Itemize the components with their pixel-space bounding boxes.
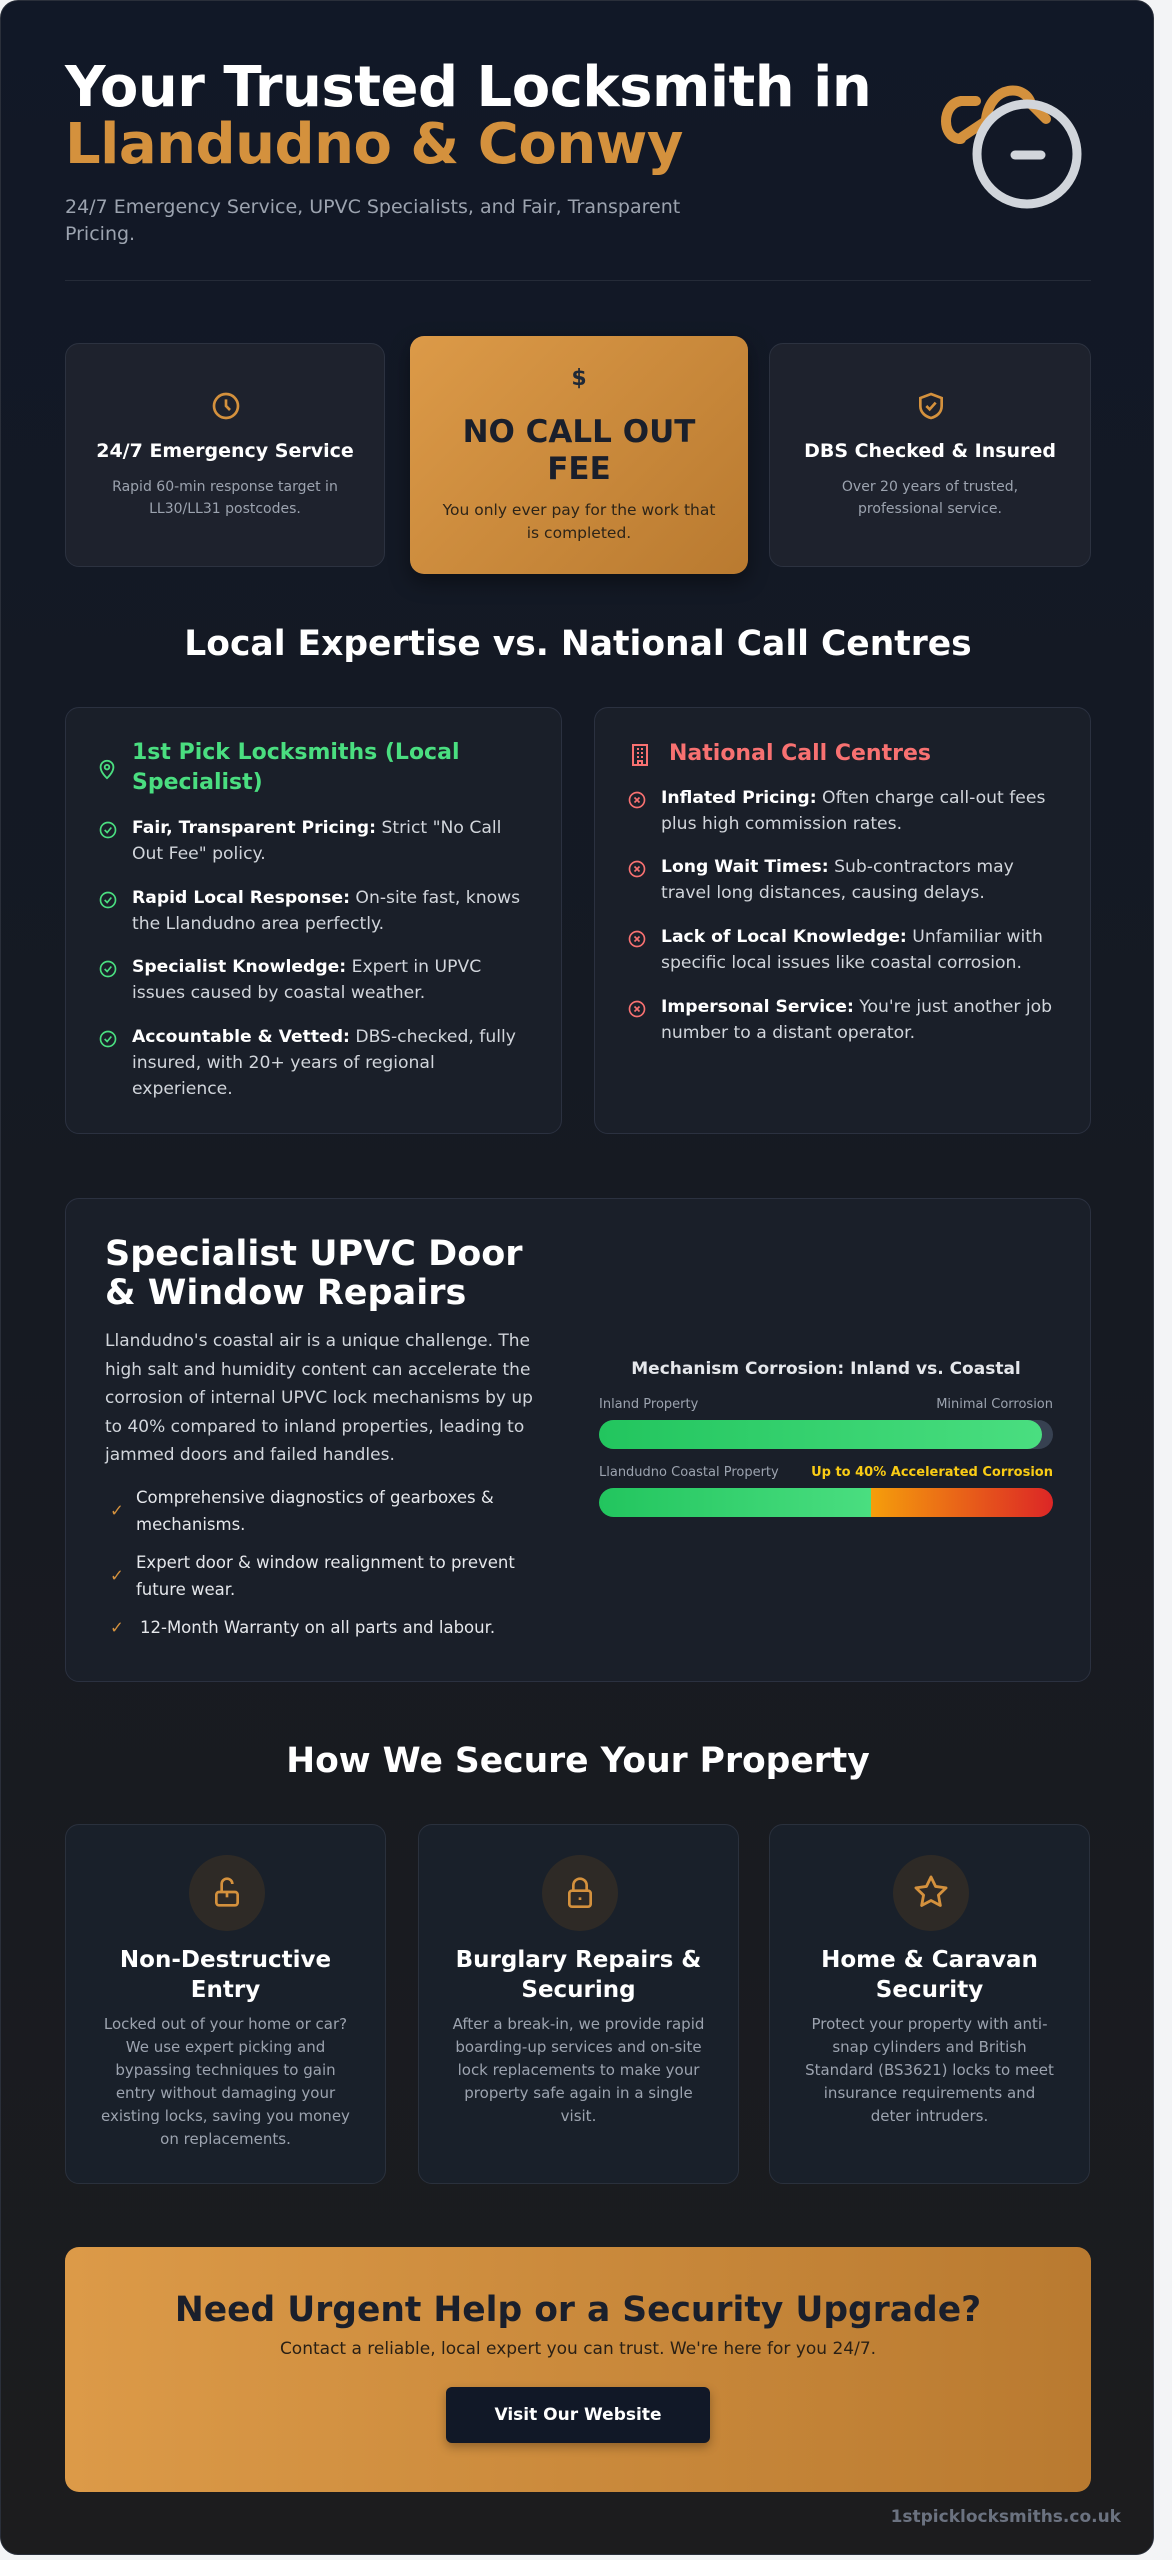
panel: local: Specialist Knowledge: Expert in UPVC issues caused by coastal weather. bbox=[132, 957, 481, 1003]
panel: national: Impersonal Service: You're just another job number to a distant operator. bbox=[661, 997, 1052, 1043]
CTA: Contact a reliable, local expert you can trust. We're here for you 24/7. bbox=[280, 2339, 876, 2359]
card: no call out fee bbox=[410, 336, 748, 574]
chart: corrosion: Mechanism Corrosion: Inland vs. Coastal bbox=[631, 1359, 1021, 1379]
chart: corrosion: Up to 40% Accelerated Corrosion bbox=[811, 1465, 1053, 1480]
card: 24/7: 24/7 Emergency Service bbox=[96, 440, 354, 462]
chart: corrosion bbox=[599, 1359, 1053, 1517]
card: no call out fee: $ bbox=[571, 366, 587, 391]
service: burglary: Burglary Repairs & Securing bbox=[456, 1947, 701, 2003]
service: non-destructive: Locked out of your home or car? We use expert picking and bypassing techniques to gain entry without damaging your existing locks, saving you money on replacements. bbox=[101, 2015, 350, 2148]
text: coastal para: Llandudno's coastal air is a unique challenge. The high salt and humidity content can accelerate the corrosion of internal UPVC lock mechanisms by up to 40% compared to inland properties, leading to jammed doors and failed handles. bbox=[105, 1331, 533, 1465]
card: DBS: Over 20 years of trusted, professional service. bbox=[842, 479, 1018, 517]
subtitle: 24/7 Emergency Service, UPVC Specialists, and Fair, Transparent Pricing. bbox=[65, 196, 680, 245]
icon: unlock bbox=[189, 1855, 265, 1931]
card: no call out fee: NO CALL OUT bbox=[463, 414, 695, 450]
panel: local: Rapid Local Response: On-site fast, knows the Llandudno area perfectly. bbox=[132, 888, 520, 934]
checklist: Expert door & window realignment to prevent future wear. bbox=[136, 1553, 515, 1598]
service: non-destructive bbox=[65, 1824, 386, 2184]
icon: lock bbox=[542, 1855, 618, 1931]
icon: pin bbox=[100, 760, 114, 780]
chart: corrosion: Minimal Corrosion bbox=[936, 1397, 1053, 1412]
button bbox=[446, 2387, 710, 2443]
CTA: Need Urgent Help or a Security Upgrade? bbox=[175, 2290, 981, 2330]
panel: UPVC bbox=[65, 1198, 1091, 1682]
icon: shield bbox=[919, 392, 943, 420]
CTA bbox=[65, 2247, 1091, 2492]
panel: local: Fair, Transparent Pricing: Strict "No Call Out Fee" policy. bbox=[132, 818, 501, 864]
footer: 1stpicklocksmiths.co.uk bbox=[891, 2507, 1121, 2527]
service: home & caravan: Home & Caravan Security bbox=[821, 1947, 1038, 2003]
card: 24/7: Rapid 60-min response target in LL30/LL31 postcodes. bbox=[112, 479, 338, 517]
checklist: 12-Month Warranty on all parts and labour. bbox=[140, 1618, 495, 1637]
checklist bbox=[110, 1488, 515, 1637]
service: burglary: After a break-in, we provide rapid boarding-up services and on-site lock replacements to make your property safe again in a single visit. bbox=[453, 2015, 704, 2125]
icon: star bbox=[893, 1855, 969, 1931]
title bbox=[64, 55, 871, 177]
panel: national: Long Wait Times: Sub-contractors may travel long distances, causing delays. bbox=[661, 857, 1014, 903]
checklist: ✓ bbox=[110, 1501, 124, 1520]
icon: clock bbox=[212, 392, 240, 420]
panel: local: 1st Pick Locksmiths (Local Specialist) bbox=[132, 740, 460, 795]
checklist: Comprehensive diagnostics of gearboxes & mechanisms. bbox=[136, 1488, 494, 1534]
chart: corrosion: Llandudno Coastal Property bbox=[599, 1465, 779, 1480]
button: Visit Our Website bbox=[494, 2405, 661, 2425]
card: DBS: DBS Checked & Insured bbox=[804, 440, 1056, 462]
service: burglary bbox=[418, 1824, 739, 2184]
panel: local: Accountable & Vetted: DBS-checked, fully insured, with 20+ years of regional experience. bbox=[132, 1027, 516, 1099]
icon: building bbox=[632, 744, 648, 766]
card: no call out fee: You only ever pay for the work that bbox=[443, 501, 715, 519]
card: DBS bbox=[769, 343, 1091, 567]
panel: national bbox=[594, 707, 1091, 1134]
card: no call out fee: is completed. bbox=[527, 524, 631, 542]
title: Your Trusted Locksmith in bbox=[65, 55, 871, 120]
service: non-destructive: Non-Destructive Entry bbox=[120, 1947, 331, 2003]
heading: how we secure: How We Secure Your Property bbox=[286, 1741, 870, 1781]
panel: national: National Call Centres bbox=[669, 741, 931, 766]
heading: local vs national: Local Expertise vs. National Call Centres bbox=[184, 624, 972, 664]
card: no call out fee: FEE bbox=[547, 451, 611, 487]
service: home & caravan: Protect your property with anti-snap cylinders and British Standard (BS3621) locks to meet insurance requirements and deter intruders. bbox=[805, 2015, 1054, 2125]
card: 24/7 bbox=[65, 343, 385, 567]
panel: local bbox=[65, 707, 562, 1134]
heading: UPVC: Specialist UPVC Door & Window Repairs bbox=[105, 1234, 523, 1313]
icon: lock/link bbox=[941, 86, 1082, 208]
panel: national: Inflated Pricing: Often charge call-out fees plus high commission rates. bbox=[661, 788, 1045, 834]
service: home & caravan bbox=[769, 1824, 1090, 2184]
title: Llandudno & Conwy bbox=[65, 112, 683, 177]
panel: national: Lack of Local Knowledge: Unfamiliar with specific local issues like coastal corrosion. bbox=[661, 927, 1043, 973]
chart: corrosion: Inland Property bbox=[599, 1397, 698, 1412]
checklist: ✓ bbox=[110, 1566, 124, 1585]
checklist: ✓ bbox=[110, 1618, 124, 1637]
